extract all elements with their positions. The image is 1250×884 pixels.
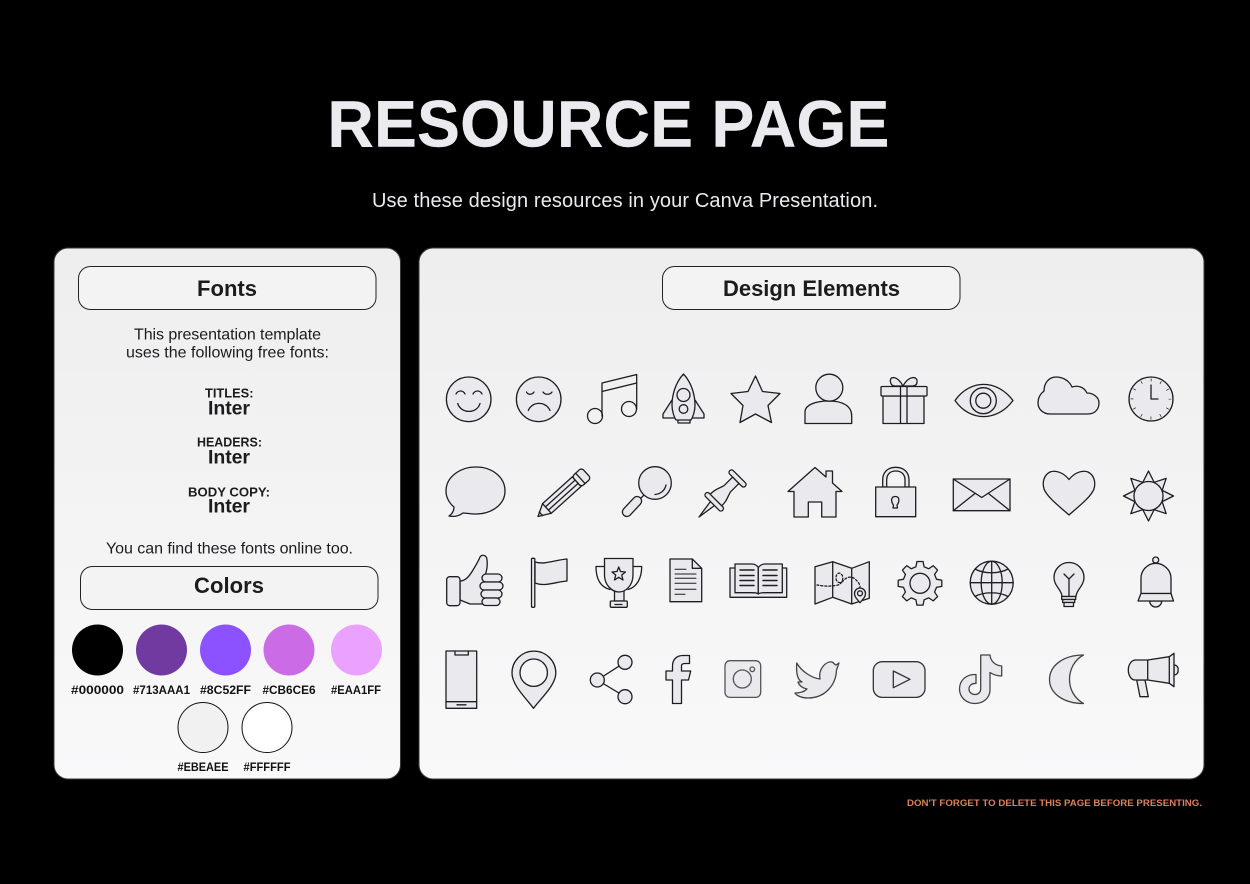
icon: pencil: [533, 468, 591, 522]
icon: video play: [873, 662, 925, 697]
swatch: white: #FFFFFF: [244, 760, 290, 774]
icon: gear: [898, 562, 942, 605]
text block: body copy font: Inter: [208, 496, 250, 518]
icon: sad face: [516, 377, 561, 422]
icon: document: [670, 559, 702, 602]
icon: magnifying glass: [621, 467, 671, 518]
swatch: dark purple: #713AAA1: [133, 683, 190, 697]
swatch: orchid: [262, 624, 316, 697]
subtitle: Use these design resources in your Canva Presentation.: [372, 190, 878, 212]
icon: smiley: [446, 377, 491, 422]
swatch: violet: [200, 624, 251, 697]
swatch: white: [242, 702, 292, 774]
icon: eye: [955, 384, 1013, 417]
text block: titles font: Inter: [208, 397, 250, 419]
swatch: light pink: [331, 624, 382, 697]
icon: tiktok: [960, 655, 1002, 704]
icon: megaphone: [1128, 653, 1178, 697]
icon: instagram: [725, 661, 761, 697]
icon: person: [805, 374, 852, 424]
icon: share: [590, 655, 632, 704]
text block: titles font: TITLES:: [205, 385, 254, 400]
swatch: black: #000000: [71, 683, 124, 697]
heading: colors: [80, 566, 378, 610]
text block: headers font: HEADERS:: [197, 434, 262, 449]
swatch: black: [71, 624, 124, 697]
icon: speech bubble: [446, 467, 505, 516]
icon: globe: [970, 561, 1013, 604]
text block: body copy font: BODY COPY:: [188, 485, 270, 500]
icon: house: [788, 468, 842, 517]
text block: fonts note: You can find these fonts online too.: [106, 540, 353, 557]
panel: design elements: [419, 248, 1204, 779]
icon: trophy: [596, 558, 642, 607]
icon: facebook: [666, 656, 691, 704]
heading: fonts: Fonts: [197, 276, 257, 301]
icon: envelope: [953, 479, 1010, 511]
icon: thumbs up: [447, 555, 503, 606]
icon: open book: [730, 564, 787, 597]
text block: titles font: [205, 385, 254, 419]
icon: smartphone: [446, 651, 477, 708]
icon: push pin: [691, 468, 748, 525]
swatch: dark purple: [133, 624, 190, 697]
icon: star: [731, 376, 780, 422]
icon: gift: [881, 378, 927, 424]
icon: bell: [1138, 557, 1174, 607]
icon: clock: [1129, 377, 1173, 421]
icon: heart: [1043, 471, 1095, 515]
icon: crescent moon: [1050, 655, 1084, 704]
swatch: light grey: #EBEAEE: [178, 760, 228, 774]
icon: light bulb: [1054, 563, 1084, 606]
swatch: light grey: [178, 702, 228, 774]
heading: design elements: [662, 266, 960, 310]
text block: body copy font: [188, 485, 270, 518]
icon: music notes: [588, 374, 637, 424]
icon: twitter bird: [795, 662, 839, 698]
icon: folded map: [815, 562, 869, 604]
panel: fonts and colors: [54, 248, 400, 779]
swatch: orchid: #CB6CE6: [262, 683, 316, 697]
title: RESOURCE PAGE: [328, 87, 890, 161]
icon: sun: [1124, 471, 1174, 521]
icon: cloud: [1038, 377, 1099, 414]
swatch: light pink: #EAA1FF: [331, 683, 381, 697]
heading: fonts: [78, 266, 376, 310]
text block: fonts intro: [126, 326, 329, 361]
text block: fonts intro: This presentation template: [134, 326, 321, 343]
swatch: violet: #8C52FF: [200, 683, 251, 697]
heading: colors: Colors: [194, 573, 264, 598]
text block: fonts intro: uses the following free fonts:: [126, 344, 329, 361]
icon: padlock: [876, 467, 916, 517]
icon: rocket: [663, 374, 704, 423]
heading: design elements: Design Elements: [723, 276, 900, 301]
icon: flag: [532, 558, 567, 607]
text block: headers font: [197, 434, 262, 468]
footer note: DON'T FORGET TO DELETE THIS PAGE BEFORE PRESENTING.: [907, 798, 1202, 809]
icon: location pin: [512, 651, 556, 708]
text block: headers font: Inter: [208, 446, 250, 468]
